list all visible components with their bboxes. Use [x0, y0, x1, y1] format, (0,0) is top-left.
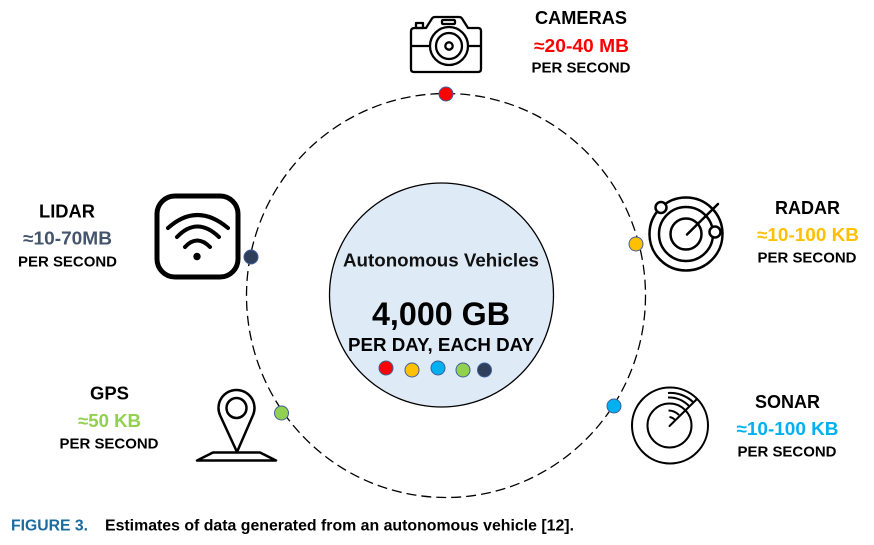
sonar label: SONAR [755, 392, 820, 412]
cameras label [532, 8, 631, 76]
hub colour dots [379, 361, 492, 377]
lidar label: PER SECOND [18, 254, 117, 270]
orbit dot: cameras [439, 87, 453, 101]
cameras label: CAMERAS [535, 8, 627, 28]
radar label: ≈10-100 KB [757, 225, 859, 245]
orbit dot: lidar [244, 250, 258, 264]
sonar label: ≈10-100 KB [736, 419, 838, 439]
radar label [757, 198, 859, 266]
lidar label: ≈10-70MB [23, 228, 112, 248]
orbit dot: radar [629, 237, 643, 251]
figure caption: FIGURE 3. [11, 518, 88, 534]
sonar label [736, 392, 838, 460]
gps label: GPS [90, 384, 129, 404]
icon: sonar [632, 388, 708, 464]
central hub panel [330, 183, 554, 407]
icon: map pin [197, 390, 276, 460]
icon: camera [411, 17, 481, 72]
figure caption: Estimates of data generated from an autonomous vehicle [12]. [105, 518, 574, 534]
hub title: Autonomous Vehicles [343, 250, 539, 270]
icon: wifi tile [157, 196, 238, 277]
hub total value: 4,000 GB [372, 296, 510, 332]
gps label [60, 384, 159, 452]
hub period: PER DAY, EACH DAY [348, 334, 535, 355]
orbit dot: gps [274, 406, 288, 420]
radar label: PER SECOND [758, 250, 857, 266]
radar label: RADAR [775, 198, 840, 218]
gps label: PER SECOND [60, 436, 159, 452]
cameras label: ≈20-40 MB [534, 36, 629, 56]
icon: radar [650, 198, 722, 270]
lidar label [18, 202, 117, 270]
sonar label: PER SECOND [738, 444, 837, 460]
lidar label: LIDAR [39, 202, 95, 222]
cameras label: PER SECOND [532, 60, 631, 76]
gps label: ≈50 KB [78, 411, 141, 431]
orbit ring [246, 94, 646, 498]
orbit dot: sonar [607, 399, 621, 413]
